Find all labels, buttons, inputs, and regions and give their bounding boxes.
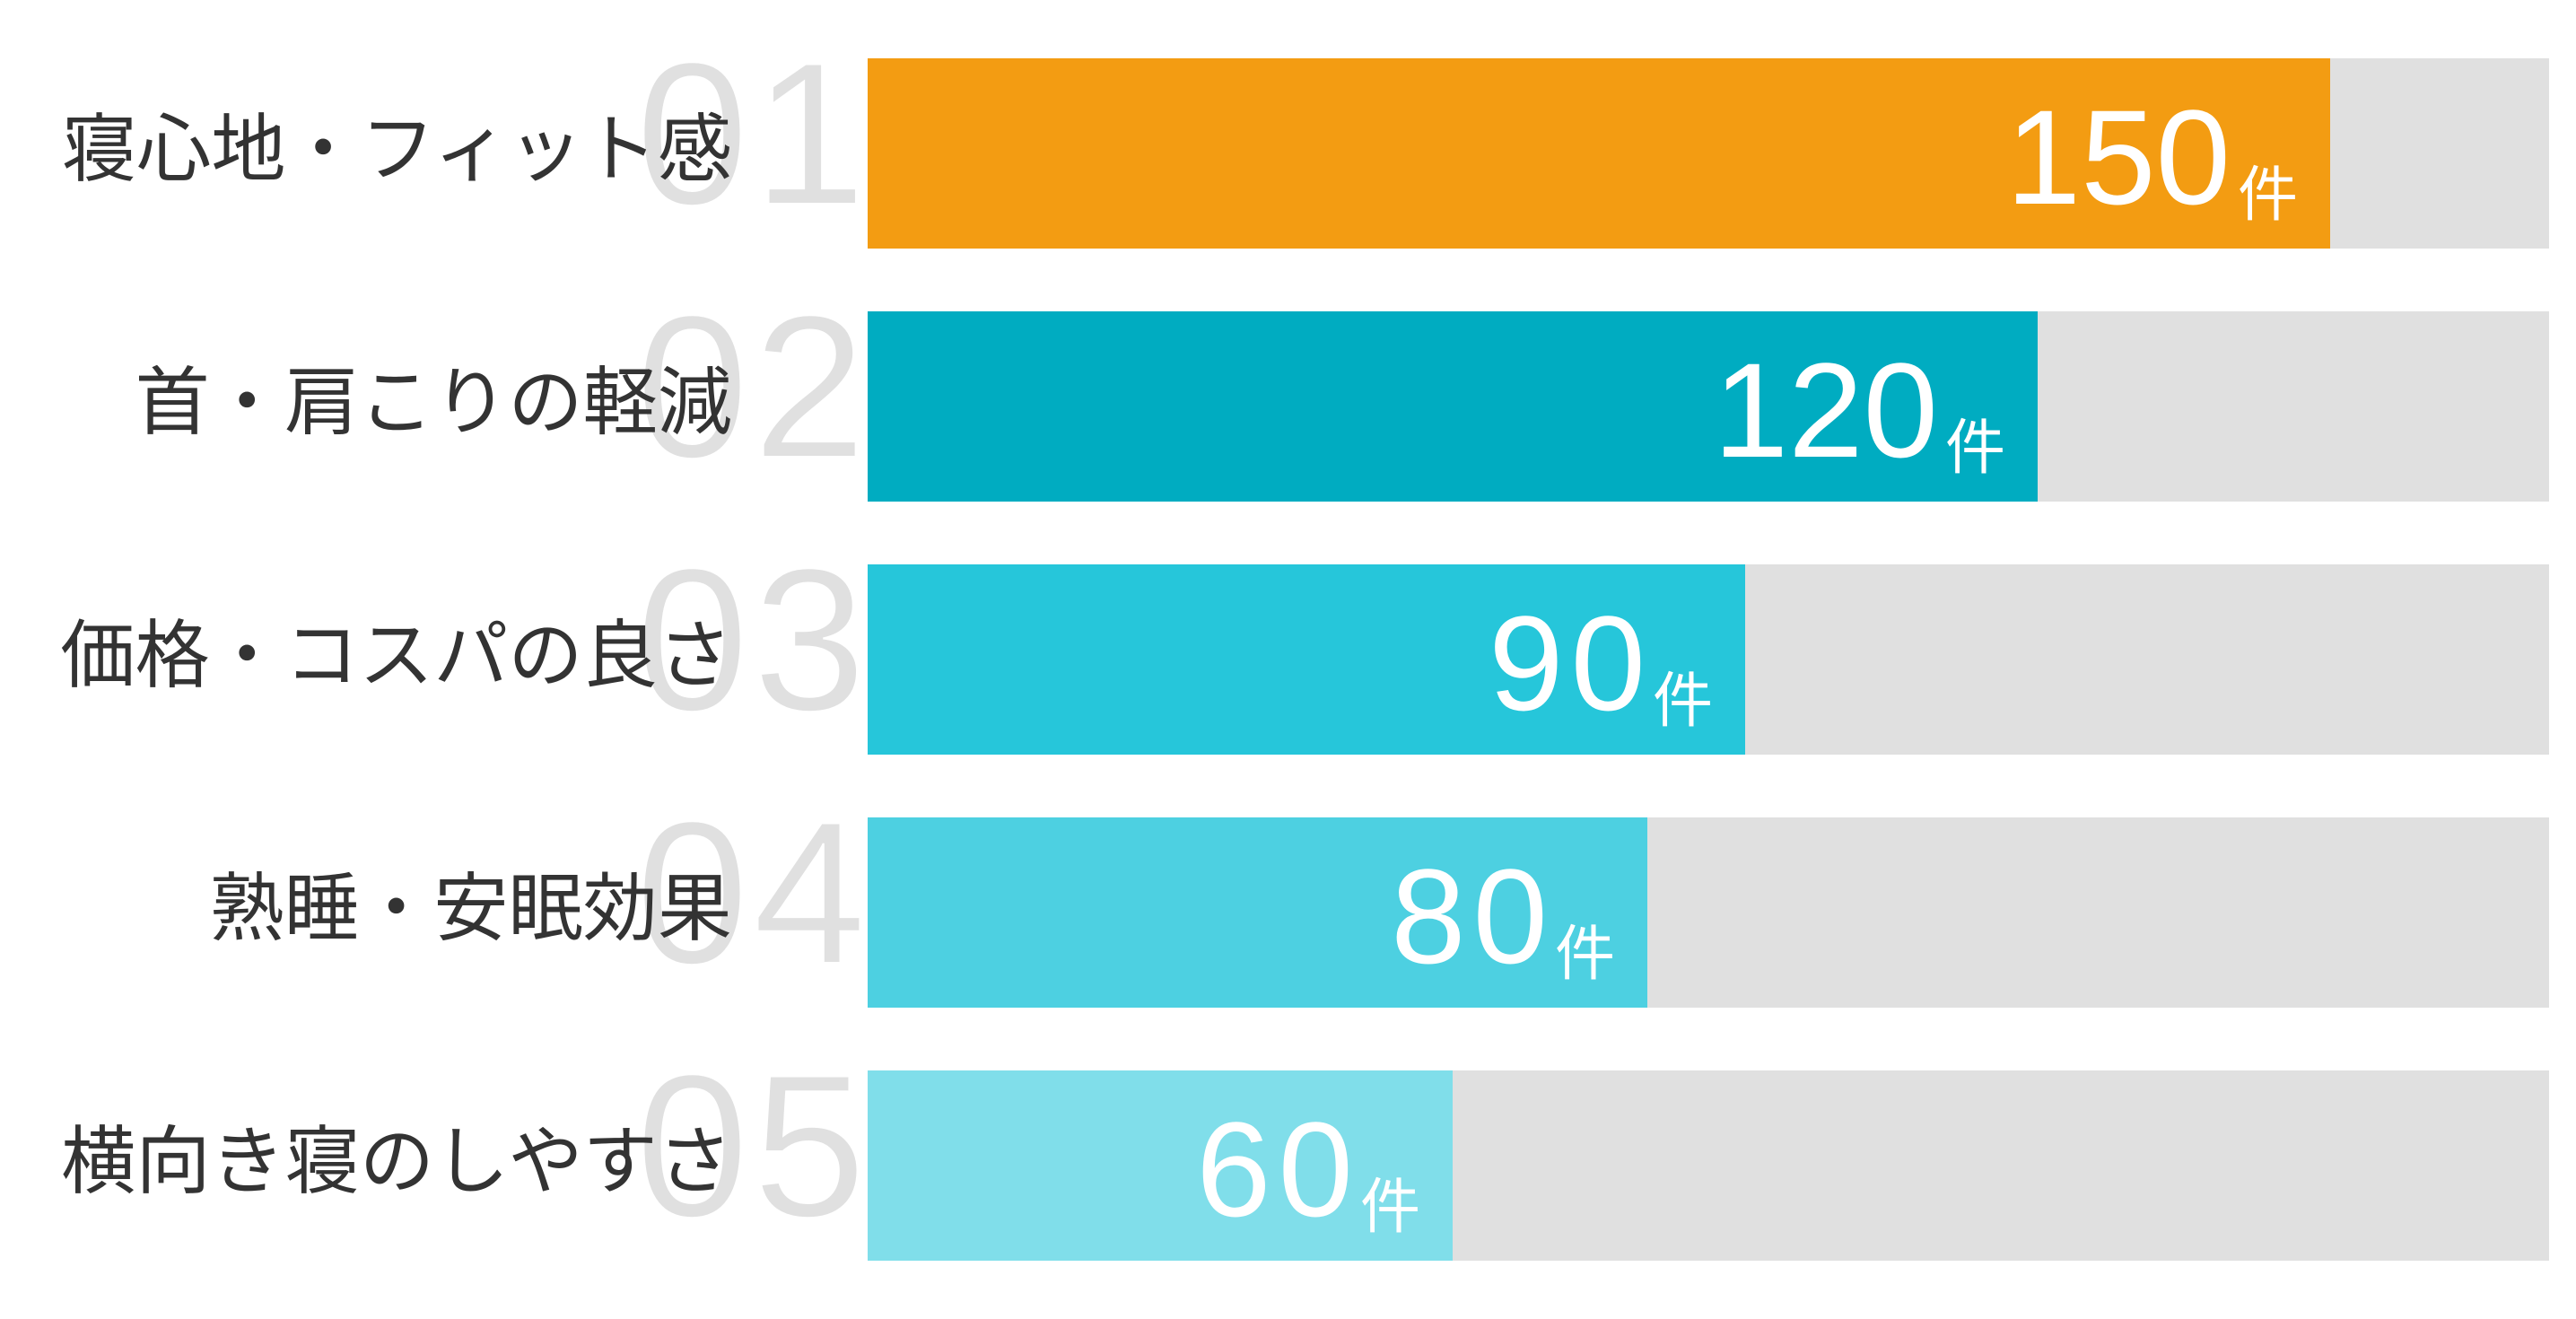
value 60: 60 <box>1196 1094 1353 1245</box>
track 01 <box>868 58 2549 249</box>
value 80: 80 <box>1391 841 1548 991</box>
label: sleep: 熟睡・安眠効果 <box>210 867 732 950</box>
unit: 件 <box>1555 921 1615 988</box>
row 01: fit <box>62 20 2549 249</box>
unit: 件 <box>1360 1174 1420 1241</box>
row 05: side sleeping <box>61 1032 2549 1261</box>
unit: 件 <box>1653 668 1713 735</box>
rank number 04: 04 <box>636 779 866 1006</box>
track 03 <box>868 564 2549 755</box>
value 90: 90 <box>1489 588 1646 738</box>
bar 04 <box>868 817 1647 1008</box>
unit: 件 <box>2238 162 2298 229</box>
bar 01 <box>868 58 2330 249</box>
label: neck and shoulder: 首・肩こりの軽減 <box>135 361 732 444</box>
track 02 <box>868 311 2549 502</box>
bar 02 <box>868 311 2038 502</box>
value 150: 150 <box>2006 82 2231 232</box>
rank number 03: 03 <box>636 526 866 753</box>
bar 05 <box>868 1070 1453 1261</box>
track 05 <box>868 1070 2549 1261</box>
rank number 02: 02 <box>636 273 866 500</box>
value 120: 120 <box>1714 335 1938 485</box>
unit: 件 <box>1945 415 2005 482</box>
row 02: neck and shoulder <box>135 273 2549 502</box>
rank number 05: 05 <box>636 1032 866 1259</box>
track 04 <box>868 817 2549 1008</box>
bar 03 <box>868 564 1745 755</box>
rank number 01: 01 <box>636 20 866 247</box>
label: price: 価格・コスパの良さ <box>60 614 732 697</box>
label: fit: 寝心地・フィット感 <box>62 108 732 191</box>
row 03: price <box>60 526 2549 755</box>
label: side sleeping: 横向き寝のしやすさ <box>61 1120 732 1203</box>
row 04: sleep <box>210 779 2549 1008</box>
